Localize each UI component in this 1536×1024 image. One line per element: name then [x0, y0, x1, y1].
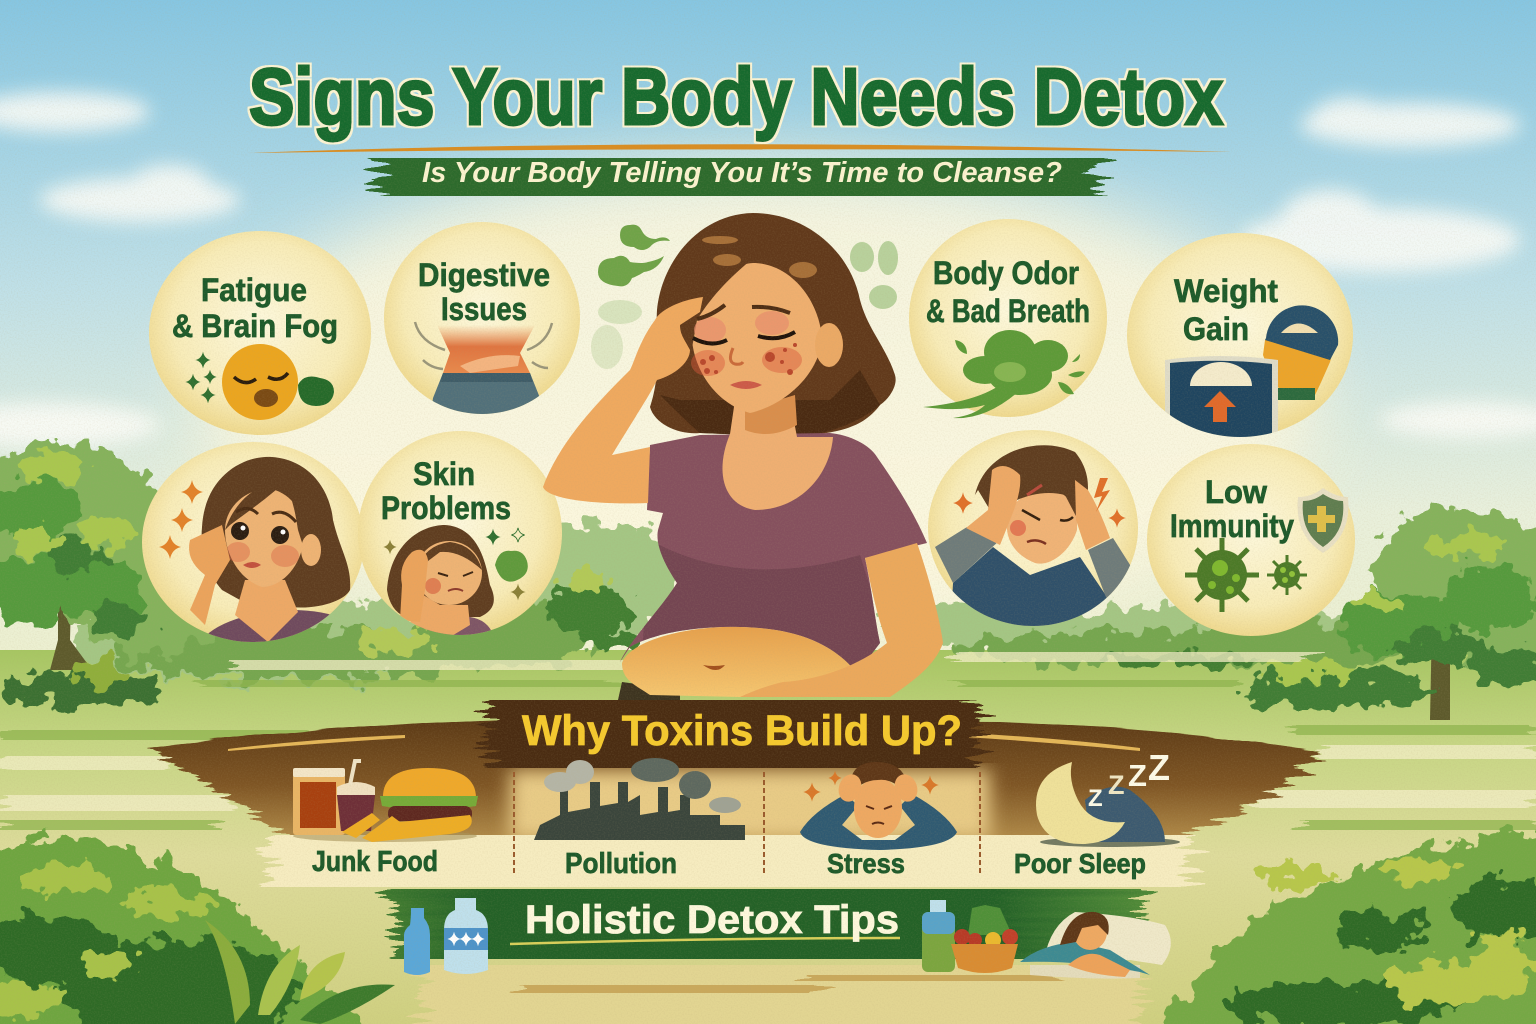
background: foreground bushes left [0, 837, 380, 1024]
panel: digestive issues [384, 222, 580, 420]
neck shadow [745, 395, 797, 434]
gold streaks [228, 733, 1140, 751]
icon: moon and sleep [1036, 747, 1180, 847]
icon: moon and sleep: Z [1128, 758, 1147, 793]
ear [815, 323, 843, 367]
icon: sore belly [415, 322, 552, 420]
divider lines [514, 772, 980, 876]
icon: bathroom scale [1165, 356, 1278, 440]
panel: skin problems [358, 431, 562, 640]
eye shadow [694, 317, 726, 343]
dirt patch [150, 720, 1320, 838]
fringe [657, 243, 775, 348]
panel: fatigue and brain fog [149, 231, 371, 435]
label: poor sleep: Poor Sleep [1014, 848, 1146, 879]
banner streak [510, 938, 900, 944]
heading banner [486, 700, 980, 768]
panel: man with headache [928, 430, 1138, 640]
panel: digestive issues: Issues [441, 291, 527, 327]
panel: holistic detox tips [395, 889, 1171, 979]
raised arm and hand [543, 297, 703, 503]
background: mid-distance bushes [70, 520, 1420, 682]
icon: lightning and sparkles [953, 478, 1126, 528]
panel: body odor and bad breath: Body Odor [933, 255, 1079, 291]
background: ground [0, 650, 1536, 1024]
background: foreground path [420, 965, 1140, 1024]
panel: low immunity: Low [1205, 474, 1267, 510]
icon: water bottles [404, 898, 488, 975]
cream band [270, 835, 1190, 887]
label: pollution: Pollution [565, 848, 677, 880]
title: Signs Your Body Needs Detox [249, 52, 1223, 141]
mouth [730, 381, 762, 389]
icon: virus [1185, 538, 1307, 612]
title underline [248, 144, 1232, 153]
label: stress: Stress [827, 848, 905, 879]
icon: fruit basket [951, 905, 1018, 973]
rash [691, 350, 725, 376]
panel: digestive issues: Digestive [418, 257, 550, 293]
brows [697, 305, 790, 319]
background: foreground leaves [205, 920, 395, 1024]
pants [618, 682, 680, 700]
icon: stressed person [800, 762, 957, 850]
panel: woman with skin spots [142, 442, 364, 650]
panel: body odor and bad breath [909, 219, 1107, 418]
right arm [740, 543, 943, 697]
icon: sleeping woman [1020, 912, 1171, 979]
hair highlights [702, 236, 817, 278]
background: meadow streaks [0, 652, 1536, 830]
background: warm centre glow [200, 160, 1320, 640]
belly [622, 627, 870, 697]
panel: low immunity: Immunity [1170, 508, 1294, 544]
icon: moon and sleep: Z [1108, 770, 1124, 800]
neck and chest [722, 400, 833, 510]
icon: shield [1298, 488, 1348, 553]
background: left tree [0, 441, 230, 708]
hair dark lower [660, 370, 880, 437]
heading banner: Why Toxins Build Up? [522, 707, 962, 755]
icon: worried woman portrait [189, 457, 350, 650]
icon: moon and sleep: Z [1148, 747, 1170, 788]
hair back [650, 213, 896, 437]
rash dots [700, 343, 797, 375]
icon: man holding head [935, 445, 1132, 640]
icon: glove and head [1263, 305, 1338, 400]
panel: low immunity [1147, 444, 1355, 636]
shirt shading [642, 544, 880, 666]
shirt [620, 433, 927, 673]
icon: orange sparkles [159, 480, 203, 559]
icon: green bottle [922, 900, 955, 972]
icon: pollution factory [534, 758, 745, 840]
panel: fatigue and brain fog: Fatigue [201, 272, 307, 308]
icon: junk food [293, 761, 478, 842]
icon: smell puffs near head [591, 225, 898, 369]
background: clouds [0, 92, 1536, 447]
icon: tired face [185, 344, 334, 420]
icon: girl with skin problem [387, 525, 495, 640]
panel: weight gain: Weight [1174, 273, 1278, 309]
panel: weight gain [1127, 233, 1353, 440]
heading: holistic detox tips: Holistic Detox Tips [525, 898, 899, 942]
panel: fatigue and brain fog: & Brain Fog [172, 308, 338, 344]
panel: skin problems: Skin [413, 456, 475, 492]
icon: moon and sleep: Z [1088, 785, 1103, 812]
label: junk food: Junk Food [312, 846, 438, 878]
background: foreground bushes right [1160, 835, 1536, 1024]
panel: body odor and bad breath: & Bad Breath [926, 293, 1090, 329]
navel [703, 665, 725, 670]
tan centre [510, 770, 990, 840]
panel: why toxins build up [150, 700, 1320, 887]
background: right tree [1240, 508, 1536, 720]
panel: skin problems: Problems [381, 490, 511, 526]
illustration: central woman [543, 213, 943, 700]
closed eyes [693, 332, 795, 344]
subtitle banner: Is Your Body Telling You It’s Time to Cleanse? [422, 157, 1062, 189]
icon: skin irritant blob and stars [383, 528, 528, 600]
icon: odor cloud [923, 330, 1085, 418]
face [692, 263, 822, 413]
panel: weight gain: Gain [1183, 311, 1249, 347]
nose [730, 348, 743, 364]
